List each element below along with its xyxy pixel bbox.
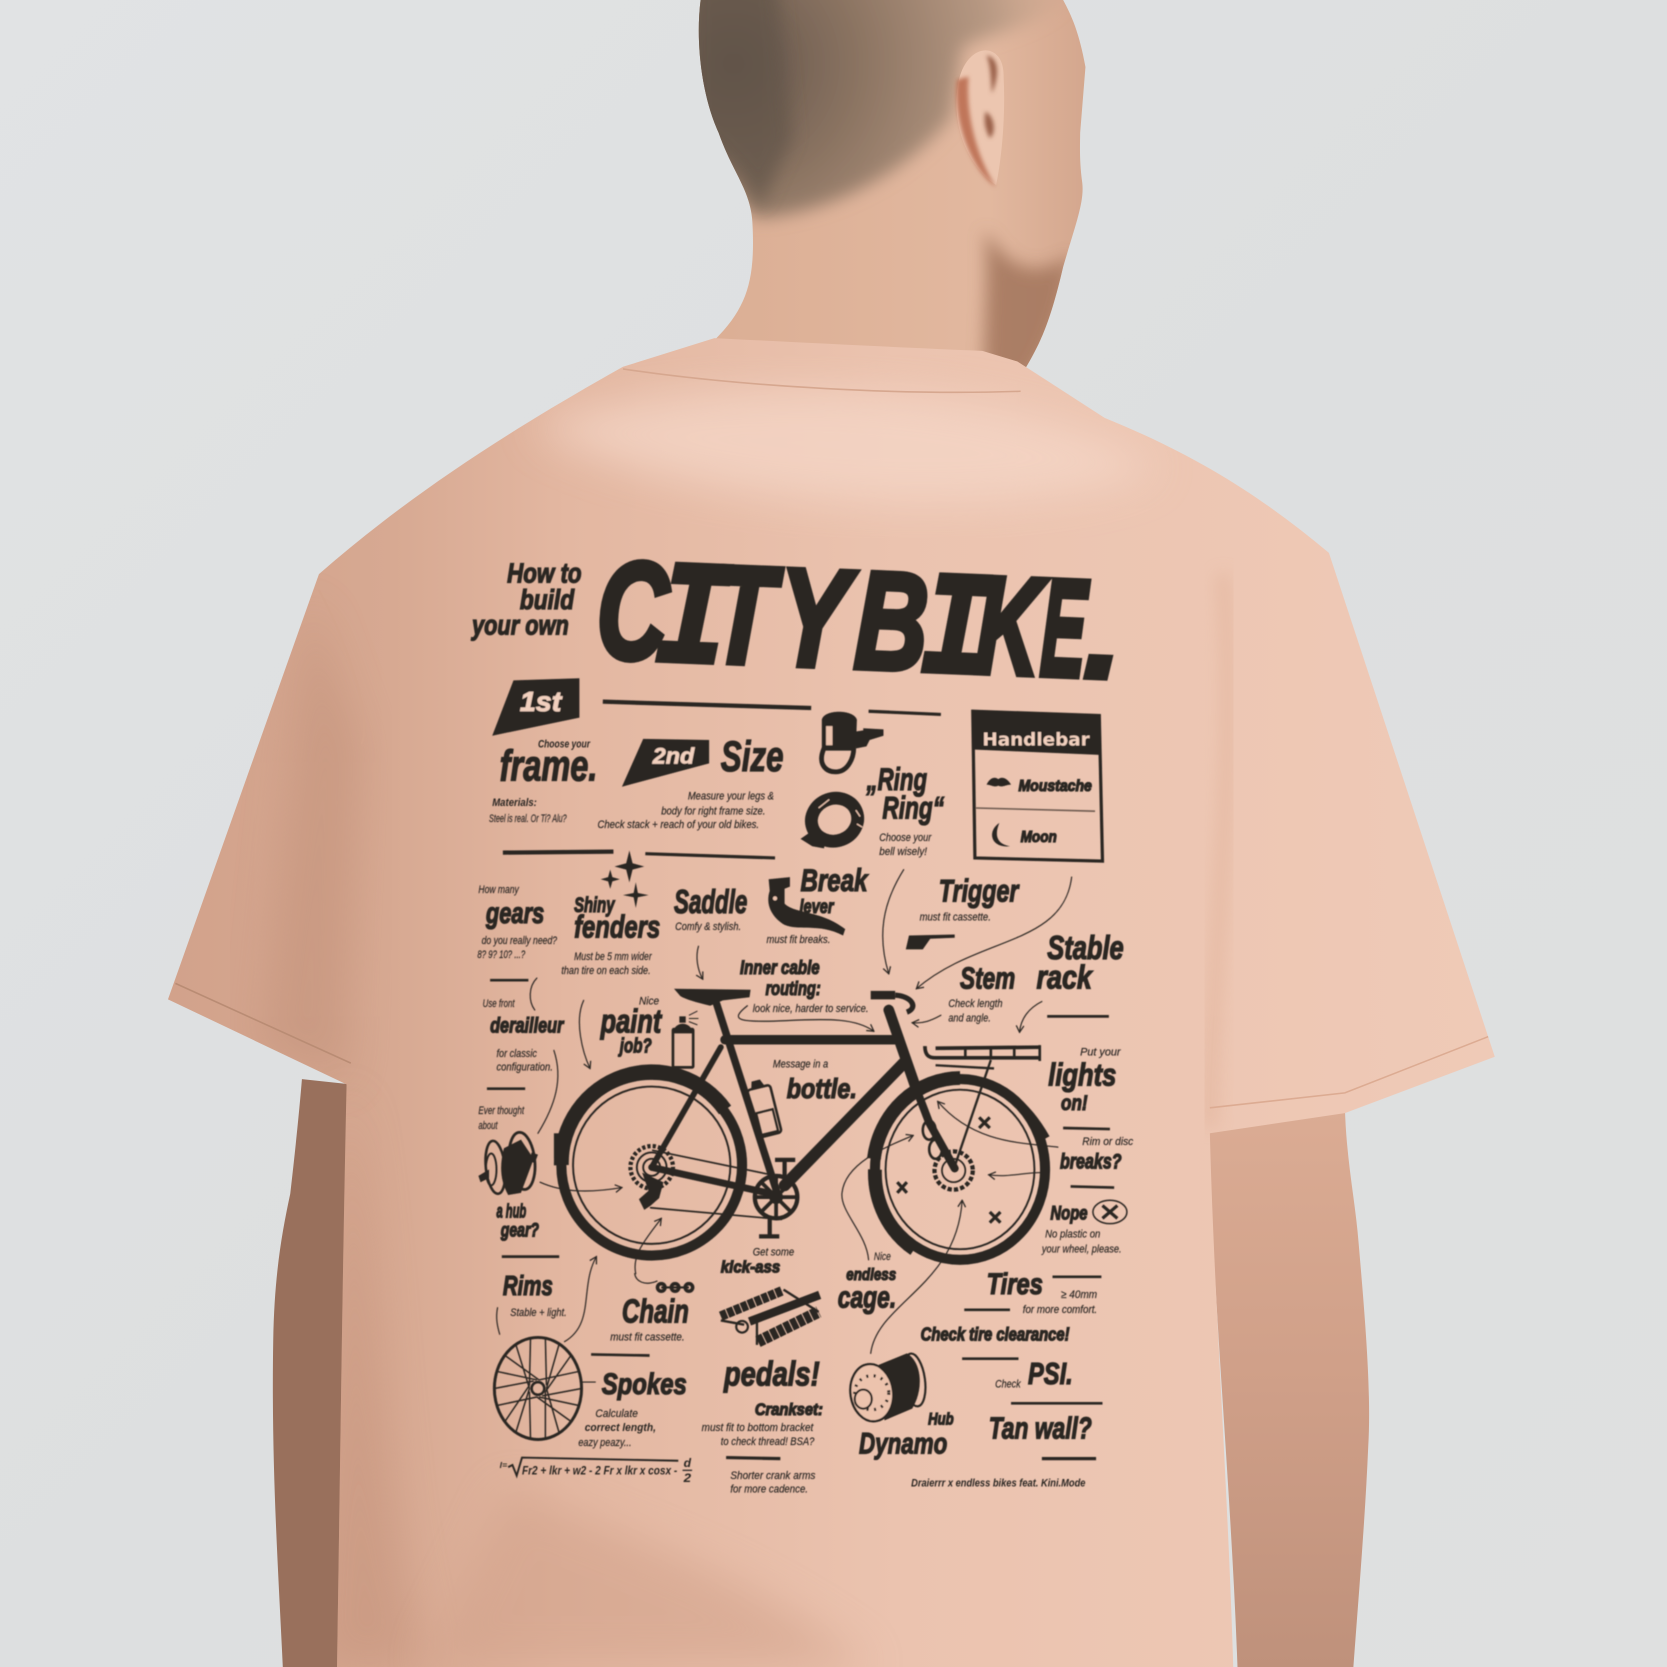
tan wall: Tan wall?: [989, 1410, 1092, 1445]
panel: handlebar: Moon: [1021, 829, 1057, 846]
panel: 2nd size: Size: [721, 734, 784, 781]
pedals and crankset block: pedals!: [723, 1355, 820, 1393]
psi block: Check: [995, 1378, 1022, 1390]
kick-ass block: kick-ass: [721, 1258, 780, 1277]
spokes block: correct length,: [585, 1422, 656, 1434]
breaks block: [1060, 1136, 1134, 1173]
panel: 1st choose your frame: frame.: [500, 742, 597, 790]
stem and rack block: Stable: [1047, 929, 1124, 966]
breaks block: breaks?: [1060, 1149, 1122, 1173]
panel: handlebar: Handlebar: [982, 729, 1090, 750]
derailleur block: derailleur: [490, 1013, 565, 1037]
endless cage block: Nice: [874, 1251, 891, 1263]
trigger block: must fit cassette.: [920, 912, 991, 924]
saddle block: Saddle: [674, 883, 747, 920]
gears block: 8? 9? 10? ...?: [477, 949, 526, 961]
left arm: [273, 1079, 351, 1667]
icon: dynamo: [847, 1352, 929, 1424]
inner cable routing block: routing:: [765, 979, 821, 1000]
lights block: Put your: [1080, 1047, 1122, 1059]
break lever block: [767, 862, 869, 946]
title: CITY BIKE: C: [594, 533, 672, 690]
nope block: Nope: [1050, 1203, 1088, 1224]
panel: 1st choose your frame: 1st: [520, 686, 563, 717]
icon: hub gear: [478, 1131, 539, 1241]
kick-ass block: Get some: [753, 1247, 794, 1259]
icon: hub gear: gear?: [500, 1220, 539, 1241]
pedals and crankset block: Shorter crank arms: [730, 1470, 816, 1482]
arrows: [497, 870, 1072, 1382]
pedals and crankset block: Crankset:: [755, 1400, 823, 1419]
message in a bottle: Message in a: [773, 1058, 828, 1070]
credit line: Draierrr x endless bikes feat. Kini.Mode: [911, 1477, 1085, 1489]
derailleur block: Ever thought: [478, 1105, 525, 1117]
nope block: No plastic on: [1045, 1228, 1100, 1240]
derailleur block: [478, 998, 565, 1132]
title: CITY BIKE: Y: [776, 540, 858, 697]
panel: 1st choose your frame: Steel is real. Or Ti? Alu?: [489, 813, 567, 825]
spokes block: [578, 1368, 687, 1449]
tires block: for more comfort.: [1023, 1304, 1097, 1316]
saddle block: [674, 883, 747, 933]
rims block: [503, 1270, 567, 1319]
derailleur block: about: [478, 1120, 498, 1132]
nope block: your wheel, please.: [1041, 1243, 1122, 1255]
title: CITY BIKE: [594, 502, 1134, 722]
inner cable routing block: [740, 958, 869, 1015]
spoke formula: [500, 1457, 692, 1485]
chain block: [610, 1284, 693, 1344]
neck shadow: [983, 229, 1072, 383]
pedals and crankset block: must fit to bottom bracket: [702, 1422, 814, 1434]
t-shirt body: [168, 338, 1495, 1667]
tires block: [921, 1268, 1097, 1345]
breaks block: Rim or disc: [1082, 1136, 1134, 1148]
print artwork: [470, 502, 1134, 1496]
bicycle illustration: [554, 989, 1047, 1260]
paint job block: paint: [600, 1002, 663, 1039]
ear: [956, 50, 1004, 185]
ring ring heading: „Ring: [866, 761, 927, 797]
gears block: gears: [485, 897, 544, 930]
hub gear caption: a hub: [496, 1201, 526, 1222]
pedals and crankset block: for more cadence.: [730, 1484, 808, 1496]
panel: 2nd size: 2nd: [652, 743, 696, 768]
title: CITY BIKE: I: [919, 551, 991, 717]
fork lock: [923, 1121, 942, 1159]
panel: 2nd size: Check stack + reach of your old bikes.: [597, 819, 759, 831]
pedals and crankset block: [702, 1355, 823, 1496]
hub dynamo block: Dynamo: [859, 1427, 947, 1460]
title: CITY BIKE: I: [653, 541, 732, 706]
endless cage block: [838, 1251, 896, 1315]
stem and rack block: and angle.: [948, 1013, 991, 1025]
hair: [698, 0, 1067, 367]
head and neck: [698, 0, 1086, 367]
kick-ass block: [721, 1247, 794, 1277]
break lever block: must fit breaks.: [767, 934, 830, 946]
panel: 1st choose your frame: Materials:: [492, 797, 537, 809]
derailleur block: Use front: [483, 998, 515, 1010]
stem and rack block: Check length: [948, 998, 1003, 1010]
psi block: [995, 1356, 1073, 1391]
inner cable routing block: look nice, harder to service.: [753, 1003, 869, 1015]
panel: handlebar: Moustache: [1018, 778, 1092, 795]
endless cage block: cage.: [838, 1280, 896, 1315]
fenders block: than tire on each side.: [561, 965, 651, 977]
title: CITY BIKE: K: [974, 548, 1049, 705]
ring ring heading: Ring“: [882, 790, 944, 826]
stem and rack block: [948, 929, 1124, 1025]
derailleur: [639, 1173, 663, 1210]
break lever block: Break: [801, 862, 869, 898]
derailleur block: configuration.: [496, 1062, 553, 1074]
tires block: ≥ 40mm: [1061, 1289, 1097, 1301]
spoke formula: l=: [500, 1460, 507, 1470]
spokes block: Spokes: [602, 1368, 687, 1401]
stem and rack block: rack: [1037, 959, 1093, 996]
paint job block: Nice: [639, 996, 659, 1008]
icon: trigger: [906, 934, 955, 949]
message in a bottle: [773, 1058, 857, 1104]
icon: spoked wheel: [494, 1337, 582, 1439]
ring ring heading: Choose your: [879, 832, 932, 844]
stem and rack block: Stem: [960, 961, 1015, 996]
trigger block: [906, 873, 1020, 949]
spokes block: Calculate: [595, 1408, 638, 1420]
pedals and crankset block: to check thread! BSA?: [721, 1436, 815, 1448]
title: CITY BIKE: T: [709, 538, 785, 694]
title: CITY BIKE: .: [1077, 522, 1134, 720]
handlebar: [871, 991, 895, 999]
fenders block: fenders: [574, 909, 660, 945]
rims block: Stable + light.: [510, 1307, 567, 1319]
icon: ring bell: [801, 792, 864, 848]
gears block: [477, 884, 558, 961]
spokes block: eazy peazy...: [578, 1437, 632, 1449]
spoke formula: 2: [682, 1472, 692, 1485]
heading: how to build your own: [470, 558, 582, 641]
fabric shading: [175, 369, 1488, 1667]
derailleur block: for classic: [496, 1048, 537, 1060]
frame: [651, 1004, 955, 1219]
panel: 2nd size: body for right frame size.: [661, 805, 765, 817]
lights block: on!: [1061, 1091, 1088, 1115]
chainring: [755, 1176, 797, 1218]
paint job block: [600, 996, 698, 1067]
chain block: must fit cassette.: [610, 1332, 685, 1344]
icon: chain: [658, 1284, 693, 1291]
break lever block: lever: [799, 897, 835, 918]
hub dynamo block: [847, 1352, 954, 1460]
message in a bottle: bottle.: [787, 1073, 857, 1104]
fenders block: Shiny: [574, 893, 615, 917]
psi block: PSI.: [1028, 1356, 1073, 1391]
panel: 1st choose your frame: Choose your: [538, 738, 591, 750]
front wheel: [874, 1078, 1047, 1260]
ring ring heading: [866, 761, 944, 858]
heading: how to build your own: your own: [470, 610, 569, 641]
icon: moustache: [987, 778, 1011, 786]
chain block: Chain: [622, 1293, 689, 1330]
saddle: [674, 989, 751, 1006]
icon: sparkles: [601, 851, 649, 908]
heading: how to build your own: build: [520, 584, 575, 615]
spoke formula: d: [684, 1457, 692, 1470]
paint job block: job?: [618, 1036, 652, 1058]
lights block: lights: [1048, 1056, 1116, 1092]
right arm: [1208, 1106, 1369, 1667]
rear wheel: [554, 1072, 742, 1256]
gears block: do you really need?: [482, 935, 558, 947]
panel: 2nd size: [597, 734, 784, 831]
panel: 1st choose your frame: [489, 678, 597, 825]
x marks: [897, 1117, 1000, 1223]
heading: how to build your own: How to: [507, 558, 582, 589]
panel: handlebar: [973, 711, 1102, 861]
endless cage block: endless: [846, 1265, 896, 1284]
water bottle: [745, 1077, 782, 1138]
rack: [925, 1045, 1040, 1169]
icon: spray can: [673, 1011, 698, 1067]
tires block: Check tire clearance!: [921, 1325, 1070, 1345]
panel: 2nd size: Measure your legs &: [688, 790, 774, 802]
nope block: [1041, 1200, 1127, 1255]
fenders block: [561, 893, 660, 977]
gears block: How many: [478, 884, 520, 896]
icon: pedals: [721, 1290, 820, 1345]
spoke formula: Fr2 + lkr + w2 - 2 Fr x lkr x cosx -: [522, 1464, 677, 1478]
icon: moon: [992, 823, 1010, 846]
divider lines: [487, 702, 1114, 1459]
title: CITY BIKE: B: [852, 543, 931, 700]
fenders block: Must be 5 mm wider: [574, 951, 653, 963]
saddle block: Comfy & stylish.: [675, 921, 741, 933]
tires block: Tires: [987, 1268, 1043, 1301]
lights block: [1048, 1047, 1122, 1115]
trigger block: Trigger: [939, 873, 1020, 909]
hub dynamo block: Hub: [928, 1410, 954, 1429]
kickstand and pedal arm: [759, 1160, 795, 1236]
title: CITY BIKE: E: [1038, 551, 1091, 707]
ring ring heading: bell wisely!: [879, 846, 927, 858]
rims block: Rims: [503, 1270, 553, 1301]
icon: bell: [822, 712, 883, 772]
inner cable routing block: Inner cable: [740, 958, 820, 979]
